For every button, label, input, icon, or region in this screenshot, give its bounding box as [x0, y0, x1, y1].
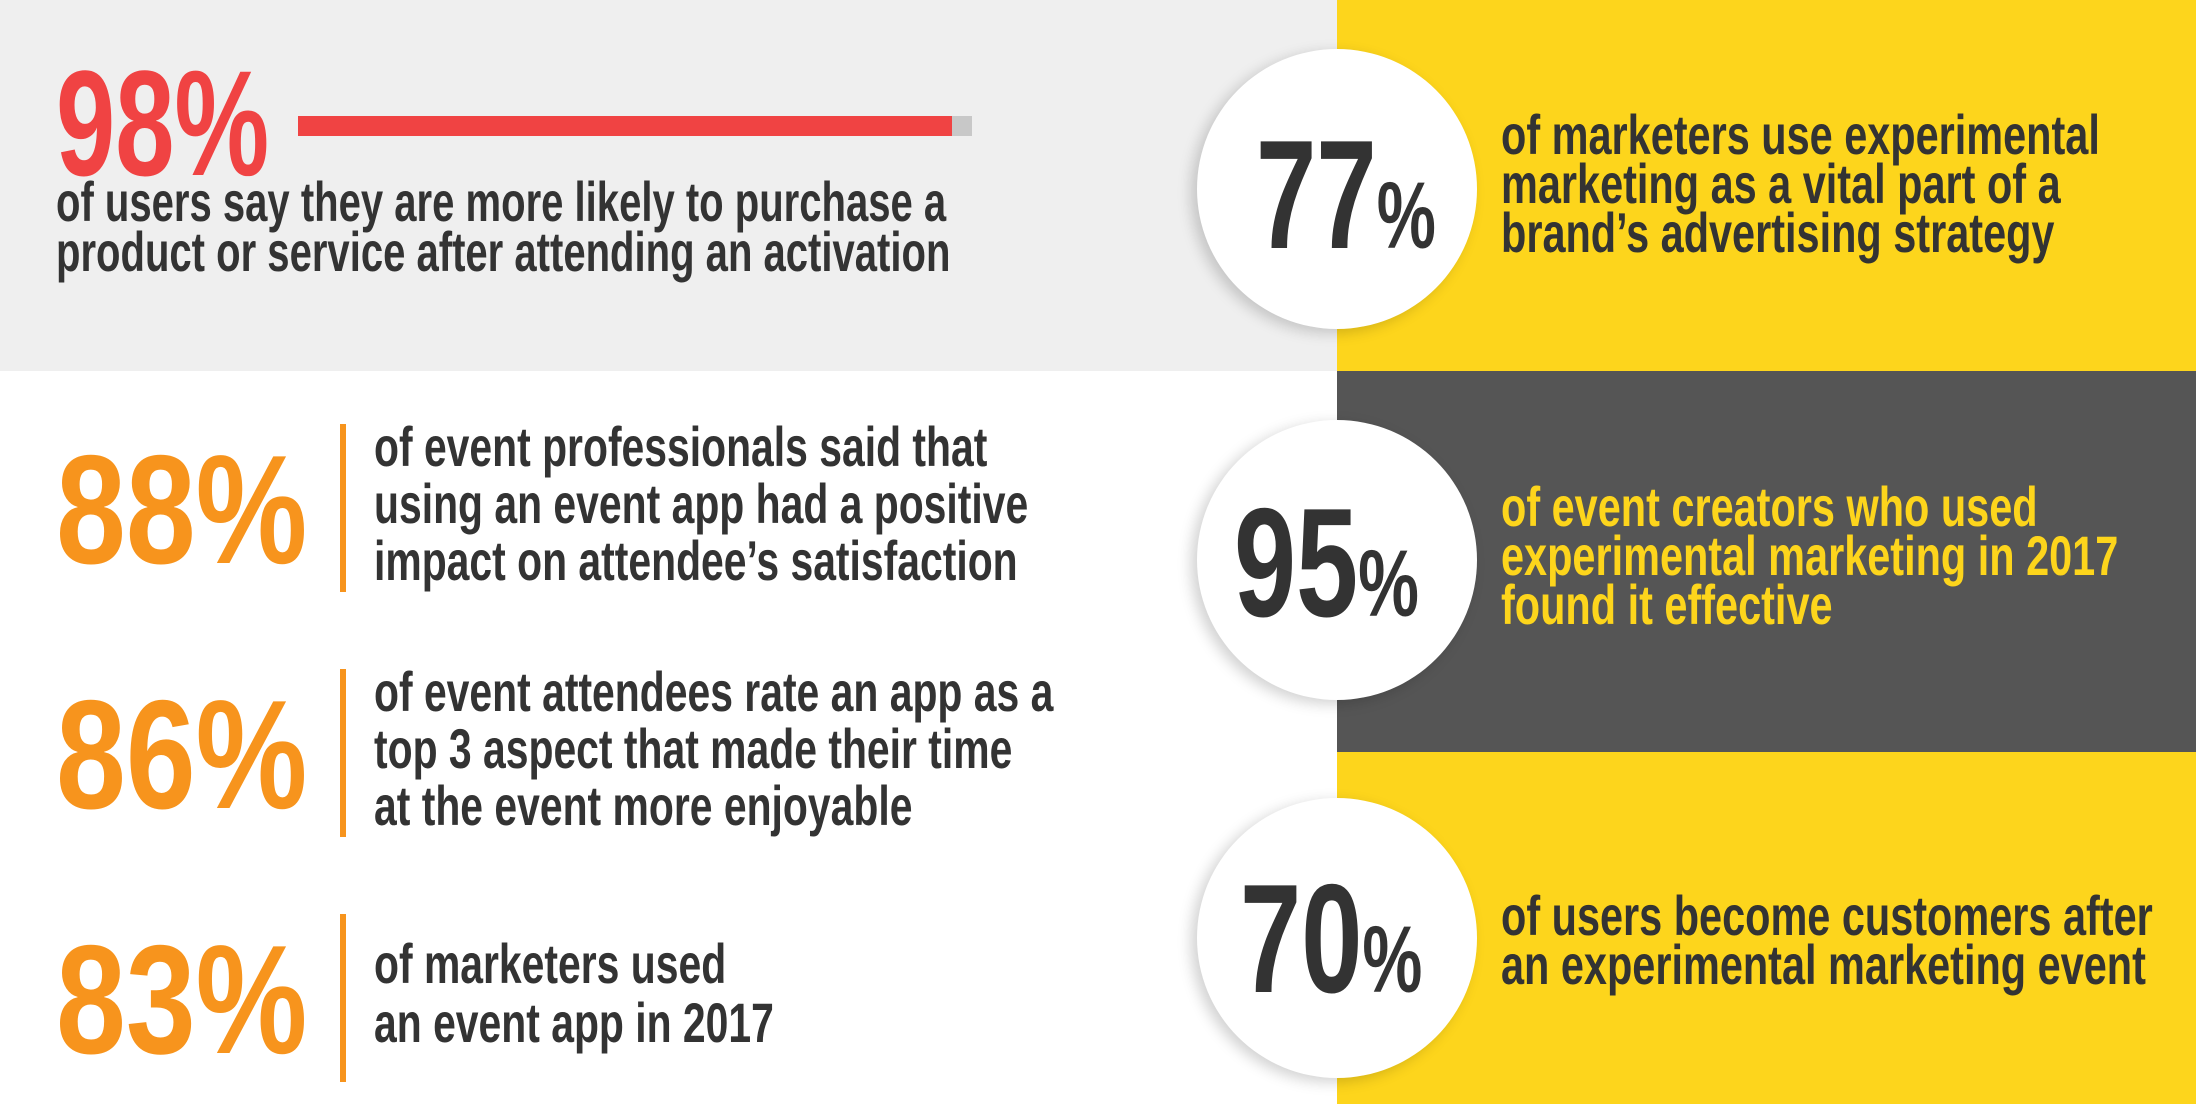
divider bar 86%: [340, 669, 346, 837]
text: 88% description: using an event app had a positive: [374, 472, 1028, 535]
text: 95% description: [1501, 475, 2118, 636]
text: 77% description: marketing as a vital part of a: [1501, 152, 2061, 215]
circle 70%: [1197, 798, 1477, 1078]
panel: top right yellow: [1337, 0, 2196, 371]
divider bar 83%: [340, 914, 346, 1082]
divider bar 88%: [340, 424, 346, 592]
stat 83%: 83%: [56, 913, 307, 1086]
text: 86% description: of event attendees rate an app as a: [374, 660, 1053, 723]
text: 83% description: of marketers used: [374, 932, 726, 995]
text: 98% description: of users say they are more likely to purchase a: [56, 170, 946, 233]
panel: bottom right yellow: [1337, 752, 2196, 1104]
text: 98% description: [56, 170, 950, 283]
text: 77% description: of marketers use experimental: [1501, 103, 2100, 166]
text: 70% description: [1501, 884, 2153, 996]
text: 95% description: found it effective: [1501, 573, 1833, 636]
panel: top left gray: [0, 0, 1337, 371]
text: 88% description: of event professionals said that: [374, 415, 987, 478]
text: 83% description: [374, 932, 774, 1054]
number 77%: 77%: [1256, 108, 1436, 281]
text: 77% description: brand’s advertising strategy: [1501, 201, 2054, 264]
text: 88% description: [374, 415, 1028, 592]
progress bar 98%: [298, 116, 972, 136]
text: 95% description: of event creators who used: [1501, 475, 2038, 538]
text: 88% description: impact on attendee’s satisfaction: [374, 529, 1018, 592]
stat 86%: 86%: [56, 668, 307, 841]
text: 77% description: [1501, 103, 2100, 264]
text: 86% description: [374, 660, 1054, 837]
stat 88%: 88%: [56, 423, 307, 596]
text: 98% description: product or service after attending an activation: [56, 220, 950, 283]
text: 70% description: of users become customers after: [1501, 884, 2153, 947]
text: 83% description: an event app in 2017: [374, 991, 774, 1054]
stat 98%: 98%: [56, 39, 269, 207]
text: 95% description: experimental marketing in 2017: [1501, 524, 2118, 587]
text: 86% description: top 3 aspect that made their time: [374, 717, 1012, 780]
circle 95%: [1197, 420, 1477, 700]
number 95%: 95%: [1234, 476, 1419, 649]
number 70%: 70%: [1240, 852, 1422, 1025]
text: 70% description: an experimental marketing event: [1501, 933, 2146, 996]
text: 86% description: at the event more enjoyable: [374, 774, 912, 837]
circle 77%: [1197, 49, 1477, 329]
panel: middle right dark: [1337, 371, 2196, 752]
